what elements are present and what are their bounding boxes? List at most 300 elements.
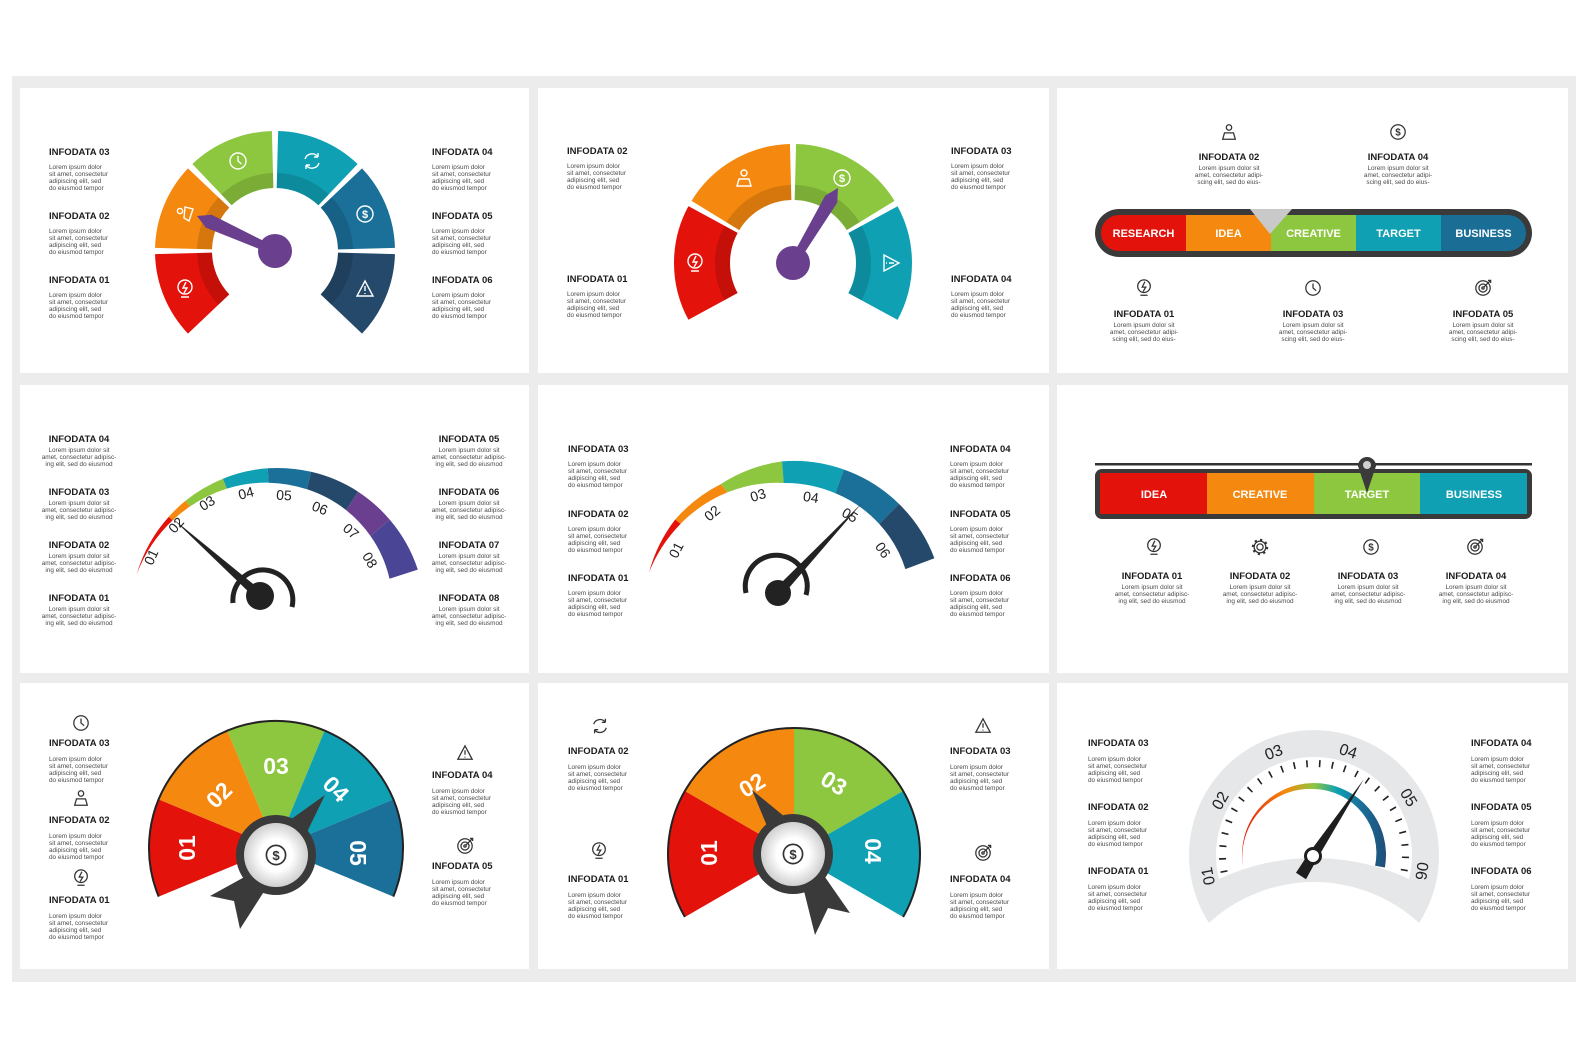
text: infodata 06: adipiscing elit, sed xyxy=(432,306,485,313)
text: infodata 05: sit amet, consectetur xyxy=(1471,827,1531,834)
text: infodata 03: adipiscing elit, sed xyxy=(49,178,102,185)
text: infodata 01: Lorem ipsum dolor xyxy=(567,291,621,298)
text: infodata 01: Lorem ipsum dolor xyxy=(1088,884,1142,891)
text: infodata 05: INFODATA 05 xyxy=(1453,309,1514,320)
text: infodata 01 xyxy=(567,274,628,319)
text: infodata 04: do eiusmod tempor xyxy=(432,809,488,816)
panel 5: six-step tapered gauge xyxy=(538,385,1049,673)
text: infodata 05: do eiusmod tempor xyxy=(950,547,1006,554)
text: infodata 02: sit amet, consectetur xyxy=(568,771,628,778)
scale numbers 01-06: 05 xyxy=(1396,786,1420,810)
text: infodata 01 xyxy=(49,895,110,941)
text: infodata 04: do eiusmod tempor xyxy=(1471,777,1527,784)
text: infodata 02 xyxy=(1088,802,1149,848)
panel 3: five-step pill bar xyxy=(1057,88,1568,373)
text: infodata 01: Lorem ipsum dolor sit xyxy=(1121,584,1183,591)
text: infodata 02: sit amet, consectetur xyxy=(568,533,628,540)
text: infodata 04: adipiscing elit, sed xyxy=(432,178,485,185)
text: infodata 05: amet, consectetur adipisc- xyxy=(432,454,506,461)
text: infodata 02: INFODATA 02 xyxy=(49,815,110,826)
text: infodata 04: Lorem ipsum dolor sit xyxy=(1445,584,1507,591)
icon: bulb xyxy=(1138,280,1150,295)
text: infodata 06: Lorem ipsum dolor xyxy=(1471,884,1525,891)
bar with top line: BUSINESS xyxy=(1446,489,1502,501)
text: infodata 04 xyxy=(1439,571,1513,605)
text: infodata 04: amet, consectetur adipisc- xyxy=(42,454,116,461)
text: infodata 04: sit amet, consectetur xyxy=(950,899,1010,906)
text: infodata 02: adipiscing elit, sed xyxy=(1088,834,1141,841)
icon: target xyxy=(976,845,991,860)
text: infodata 06: amet, consectetur adipisc- xyxy=(432,507,506,514)
text: infodata 05: INFODATA 05 xyxy=(432,861,493,872)
text: infodata 02: adipiscing elit, sed xyxy=(567,177,620,184)
text: infodata 02: Lorem ipsum dolor sit xyxy=(1198,165,1260,172)
text: infodata 07 xyxy=(432,540,506,574)
text: infodata 02: amet, consectetur adipi- xyxy=(1195,172,1263,179)
text: infodata 01: adipiscing elit, sed xyxy=(568,604,621,611)
text: infodata 02: sit amet, consectetur xyxy=(1088,827,1148,834)
text: infodata 03: do eiusmod tempor xyxy=(49,777,105,784)
scale numbers 01-06 xyxy=(1199,741,1431,886)
pointer spikes xyxy=(752,790,850,935)
text: infodata 03: do eiusmod tempor xyxy=(951,184,1007,191)
scale numbers 01-08: 03 xyxy=(196,492,218,514)
text: infodata 04 xyxy=(1364,152,1432,186)
text: infodata 02 xyxy=(568,509,629,554)
text: infodata 02: scing elit, sed do eius- xyxy=(1197,179,1261,186)
text: infodata 02: sit amet, consectetur xyxy=(567,170,627,177)
text: infodata 05 xyxy=(950,509,1011,554)
text: infodata 02: Lorem ipsum dolor sit xyxy=(48,553,110,560)
icon: warning xyxy=(976,719,990,732)
icon: person xyxy=(1223,125,1235,139)
text: infodata 04: adipiscing elit, sed xyxy=(951,305,1004,312)
text: infodata 03: INFODATA 03 xyxy=(49,147,110,158)
text: infodata 02: sit amet, consectetur xyxy=(49,235,109,242)
text: infodata 05: INFODATA 05 xyxy=(950,509,1011,520)
scale numbers 01-06 xyxy=(665,485,894,561)
text: infodata 02: do eiusmod tempor xyxy=(49,854,105,861)
gauge: six colored segments xyxy=(146,122,404,380)
text: infodata 01: Lorem ipsum dolor xyxy=(49,292,103,299)
text: infodata 04: INFODATA 04 xyxy=(432,770,493,781)
scale numbers 01-08: 08 xyxy=(359,549,381,571)
text: infodata 03: INFODATA 03 xyxy=(49,738,110,749)
scale numbers 01-06: 05 xyxy=(839,504,861,526)
gauge arc: tapered segments xyxy=(137,468,418,579)
text: infodata 02: do eiusmod tempor xyxy=(1088,841,1144,848)
scale numbers 01-06: 01 xyxy=(665,539,687,561)
text: infodata 03 xyxy=(42,487,116,521)
text: infodata 05: INFODATA 05 xyxy=(439,434,500,445)
text: infodata 03: Lorem ipsum dolor xyxy=(1088,756,1142,763)
text: infodata 01: adipiscing elit, sed xyxy=(49,927,102,934)
slice numbers: 03 xyxy=(816,765,852,801)
text: infodata 01: INFODATA 01 xyxy=(49,895,110,906)
text: infodata 03 xyxy=(568,444,629,489)
text: infodata 02: adipiscing elit, sed xyxy=(49,242,102,249)
icon: bulb xyxy=(75,870,87,885)
slice numbers xyxy=(696,765,886,866)
text: infodata 05: do eiusmod tempor xyxy=(432,900,488,907)
text: infodata 04: do eiusmod tempor xyxy=(432,185,488,192)
scale numbers 01-08: 04 xyxy=(236,483,256,503)
text: infodata 04: INFODATA 04 xyxy=(950,444,1011,455)
text: infodata 02: Lorem ipsum dolor xyxy=(568,526,622,533)
text: infodata 02: ing elit, sed do eiusmod xyxy=(45,567,113,574)
text: infodata 05: INFODATA 05 xyxy=(432,211,493,222)
panel 1: six-segment gauge xyxy=(20,88,529,373)
text: infodata 05: Lorem ipsum dolor sit xyxy=(438,447,500,454)
text: infodata 01: scing elit, sed do eius- xyxy=(1112,336,1176,343)
icon: dollar xyxy=(1364,540,1378,554)
slice numbers: 01 xyxy=(696,840,722,866)
icon: warning xyxy=(458,746,472,759)
text: infodata 01: Lorem ipsum dolor xyxy=(49,913,103,920)
text: infodata 04: INFODATA 04 xyxy=(1368,152,1429,163)
panel 9: speedometer with ticks xyxy=(1057,683,1568,969)
text: infodata 04: INFODATA 04 xyxy=(950,874,1011,885)
text: infodata 02 xyxy=(49,815,110,861)
text: infodata 01: Lorem ipsum dolor xyxy=(568,590,622,597)
icon: gear xyxy=(1253,540,1267,554)
needle with hub xyxy=(745,503,862,606)
bar xyxy=(1095,209,1532,257)
text: infodata 01 xyxy=(568,573,629,618)
text: infodata 03: ing elit, sed do eiusmod xyxy=(45,514,113,521)
text: infodata 07: ing elit, sed do eiusmod xyxy=(435,567,503,574)
text: infodata 05: adipiscing elit, sed xyxy=(432,242,485,249)
text: infodata 04 xyxy=(42,434,116,468)
panel 8: four-slice fan dial xyxy=(538,683,1049,969)
text: infodata 03: adipiscing elit, sed xyxy=(951,177,1004,184)
text: infodata 01: Lorem ipsum dolor xyxy=(568,892,622,899)
text: infodata 05: sit amet, consectetur xyxy=(432,235,492,242)
text: infodata 04: adipiscing elit, sed xyxy=(950,906,1003,913)
text: infodata 08: INFODATA 08 xyxy=(439,593,499,604)
text: infodata 01: do eiusmod tempor xyxy=(568,611,624,618)
speedometer body xyxy=(1177,730,1452,969)
scale numbers 01-06: 06 xyxy=(872,539,894,561)
text: infodata 01: do eiusmod tempor xyxy=(1088,905,1144,912)
text: infodata 02: adipiscing elit, sed xyxy=(568,540,621,547)
icon: clock xyxy=(1306,281,1320,295)
text: infodata 04: Lorem ipsum dolor xyxy=(950,892,1004,899)
text: infodata 01: INFODATA 01 xyxy=(1114,309,1175,320)
text: infodata 02 xyxy=(1223,571,1297,605)
icon: clock xyxy=(74,716,88,730)
text: infodata 04: amet, consectetur adipisc- xyxy=(1439,591,1513,598)
text: infodata 02: Lorem ipsum dolor xyxy=(567,163,621,170)
text: infodata 06: sit amet, consectetur xyxy=(432,299,492,306)
text: infodata 03: INFODATA 03 xyxy=(951,146,1012,157)
text: infodata 05 xyxy=(1471,802,1532,848)
text: infodata 03: INFODATA 03 xyxy=(1088,738,1149,749)
icon: person xyxy=(75,791,87,805)
text: infodata 05: do eiusmod tempor xyxy=(432,249,488,256)
text: infodata 03: Lorem ipsum dolor xyxy=(568,461,622,468)
text: infodata 02 xyxy=(42,540,116,574)
icon: bulb xyxy=(593,843,605,858)
bar: TARGET xyxy=(1376,228,1421,240)
text: infodata 06: do eiusmod tempor xyxy=(432,313,488,320)
text: infodata 03: sit amet, consectetur xyxy=(568,468,628,475)
text: infodata 02: INFODATA 02 xyxy=(1088,802,1149,813)
text: infodata 01: INFODATA 01 xyxy=(568,874,629,885)
text: infodata 01 xyxy=(42,593,116,627)
bar with top line: IDEA xyxy=(1141,489,1167,501)
text: infodata 01 xyxy=(568,874,629,920)
text: infodata 02: Lorem ipsum dolor xyxy=(1088,820,1142,827)
text: infodata 06: INFODATA 06 xyxy=(432,275,493,286)
text: infodata 05: Lorem ipsum dolor xyxy=(1471,820,1525,827)
text: infodata 05: do eiusmod tempor xyxy=(1471,841,1527,848)
text: infodata 06: adipiscing elit, sed xyxy=(950,604,1003,611)
text: infodata 01: adipiscing elit, sed xyxy=(567,305,620,312)
text: infodata 04: do eiusmod tempor xyxy=(951,312,1007,319)
slice numbers: 05 xyxy=(345,840,371,866)
text: infodata 03 xyxy=(1088,738,1149,784)
text: infodata 02: sit amet, consectetur xyxy=(49,840,109,847)
fan slices xyxy=(668,728,920,917)
icon: bulb xyxy=(1148,539,1160,554)
text: infodata 02: INFODATA 02 xyxy=(49,540,109,551)
text: infodata 01: amet, consectetur adipi- xyxy=(1110,329,1178,336)
gauge: four colored segments xyxy=(668,138,918,388)
text: infodata 03: sit amet, consectetur xyxy=(49,763,109,770)
slice numbers: 02 xyxy=(201,777,237,813)
text: infodata 01: do eiusmod tempor xyxy=(567,312,623,319)
text: infodata 04: sit amet, consectetur xyxy=(432,171,492,178)
slice numbers: 04 xyxy=(318,771,354,807)
text: infodata 03: Lorem ipsum dolor xyxy=(951,163,1005,170)
text: infodata 05: sit amet, consectetur xyxy=(950,533,1010,540)
pointer spikes xyxy=(210,795,325,929)
scale numbers 01-06: 03 xyxy=(1263,742,1285,764)
scale numbers 01-06: 01 xyxy=(1199,866,1219,886)
slice numbers: 02 xyxy=(734,767,770,803)
needle xyxy=(197,215,292,268)
text: infodata 04: amet, consectetur adipi- xyxy=(1364,172,1432,179)
text: infodata 04 xyxy=(432,770,493,816)
icon: refresh xyxy=(594,719,606,733)
text: infodata 04: Lorem ipsum dolor sit xyxy=(48,447,110,454)
gauge arc: tapered segments xyxy=(649,461,934,572)
text: infodata 03: adipiscing elit, sed xyxy=(1088,770,1141,777)
text: infodata 02: adipiscing elit, sed xyxy=(568,778,621,785)
text: infodata 04: INFODATA 04 xyxy=(432,147,493,158)
text: infodata 04: INFODATA 04 xyxy=(1471,738,1532,749)
text: infodata 01: INFODATA 01 xyxy=(1122,571,1183,582)
scale numbers 01-08: 06 xyxy=(310,498,330,518)
text: infodata 03 xyxy=(49,738,110,784)
bar: BUSINESS xyxy=(1455,228,1512,240)
text: infodata 06: sit amet, consectetur xyxy=(950,597,1010,604)
text: infodata 02: INFODATA 02 xyxy=(568,746,629,757)
text: infodata 03: Lorem ipsum dolor xyxy=(950,764,1004,771)
text: infodata 01: sit amet, consectetur xyxy=(1088,891,1148,898)
text: infodata 02: ing elit, sed do eiusmod xyxy=(1226,598,1294,605)
text: infodata 07: INFODATA 07 xyxy=(439,540,499,551)
text: infodata 03: INFODATA 03 xyxy=(1283,309,1343,320)
text: infodata 06: INFODATA 06 xyxy=(950,573,1011,584)
text: infodata 01: adipiscing elit, sed xyxy=(49,306,102,313)
text: infodata 05: amet, consectetur adipi- xyxy=(1449,329,1517,336)
text: infodata 04: INFODATA 04 xyxy=(49,434,110,445)
scale numbers 01-06: 04 xyxy=(802,488,820,506)
text: infodata 08: Lorem ipsum dolor sit xyxy=(438,606,500,613)
text: infodata 04 xyxy=(1471,738,1532,784)
text: infodata 06 xyxy=(432,487,506,521)
text: infodata 08: amet, consectetur adipisc- xyxy=(432,613,506,620)
text: infodata 02: amet, consectetur adipisc- xyxy=(42,560,116,567)
text: infodata 03 xyxy=(951,146,1012,191)
text: infodata 07: Lorem ipsum dolor sit xyxy=(438,553,500,560)
scale numbers 01-08: 02 xyxy=(165,514,187,536)
text: infodata 01: amet, consectetur adipisc- xyxy=(42,613,116,620)
scale numbers 01-06: 02 xyxy=(1209,789,1233,813)
text: infodata 04: INFODATA 04 xyxy=(1446,571,1507,582)
bar: CREATIVE xyxy=(1286,228,1341,240)
text: infodata 06: INFODATA 06 xyxy=(439,487,499,498)
scale numbers 01-06: 06 xyxy=(1411,861,1431,881)
icon: target xyxy=(1476,280,1491,295)
text: infodata 01: Lorem ipsum dolor sit xyxy=(48,606,110,613)
text: infodata 03: amet, consectetur adipisc- xyxy=(42,507,116,514)
text: infodata 01: sit amet, consectetur xyxy=(568,597,628,604)
scale numbers 01-06: 02 xyxy=(701,502,723,524)
text: infodata 01: sit amet, consectetur xyxy=(567,298,627,305)
text: infodata 05: ing elit, sed do eiusmod xyxy=(435,461,503,468)
text: infodata 05: INFODATA 05 xyxy=(1471,802,1532,813)
text: infodata 04: Lorem ipsum dolor sit xyxy=(1367,165,1429,172)
text: infodata 02: amet, consectetur adipisc- xyxy=(1223,591,1297,598)
text: infodata 03: INFODATA 03 xyxy=(568,444,629,455)
text: infodata 06 xyxy=(950,573,1011,618)
text: infodata 02 xyxy=(49,211,110,256)
needle xyxy=(776,188,838,280)
text: infodata 03: adipiscing elit, sed xyxy=(568,475,621,482)
text: infodata 04: sit amet, consectetur xyxy=(1471,763,1531,770)
text: infodata 03: Lorem ipsum dolor sit xyxy=(48,500,110,507)
text: infodata 06: Lorem ipsum dolor xyxy=(432,292,486,299)
text: infodata 01: do eiusmod tempor xyxy=(49,313,105,320)
bar: IDEA xyxy=(1215,228,1242,240)
text: infodata 05 xyxy=(1449,309,1517,343)
icons on segments xyxy=(177,153,373,297)
text: infodata 05: Lorem ipsum dolor xyxy=(432,228,486,235)
text: infodata 02: INFODATA 02 xyxy=(1230,571,1290,582)
text: infodata 02 xyxy=(568,746,629,792)
slice numbers: 03 xyxy=(263,753,289,779)
text: infodata 03: ing elit, sed do eiusmod xyxy=(1334,598,1402,605)
text: infodata 06: Lorem ipsum dolor xyxy=(950,590,1004,597)
text: infodata 05: adipiscing elit, sed xyxy=(432,893,485,900)
text: infodata 05: adipiscing elit, sed xyxy=(950,540,1003,547)
text: infodata 05 xyxy=(432,861,493,907)
text: infodata 04: do eiusmod tempor xyxy=(950,482,1006,489)
text: infodata 05: Lorem ipsum dolor xyxy=(950,526,1004,533)
text: infodata 06: Lorem ipsum dolor sit xyxy=(438,500,500,507)
text: infodata 04: Lorem ipsum dolor xyxy=(432,164,486,171)
slice numbers xyxy=(174,753,371,866)
slice numbers: 04 xyxy=(860,838,886,864)
text: infodata 04 xyxy=(950,444,1011,489)
text: infodata 01: INFODATA 01 xyxy=(1088,866,1149,877)
text: infodata 06 xyxy=(1471,866,1532,912)
text: infodata 04: ing elit, sed do eiusmod xyxy=(1442,598,1510,605)
text: infodata 01: ing elit, sed do eiusmod xyxy=(45,620,113,627)
text: infodata 04: adipiscing elit, sed xyxy=(950,475,1003,482)
bar with top line xyxy=(1095,463,1532,519)
text: infodata 03: sit amet, consectetur xyxy=(951,170,1011,177)
text: infodata 02: Lorem ipsum dolor xyxy=(568,764,622,771)
text: infodata 04: ing elit, sed do eiusmod xyxy=(45,461,113,468)
text: infodata 03 xyxy=(950,746,1011,792)
bar with top line: TARGET xyxy=(1345,489,1389,501)
text: infodata 01: sit amet, consectetur xyxy=(49,920,109,927)
text: infodata 01: adipiscing elit, sed xyxy=(1088,898,1141,905)
text: infodata 04: sit amet, consectetur xyxy=(950,468,1010,475)
text: infodata 01 xyxy=(49,275,110,320)
text: infodata 05: sit amet, consectetur xyxy=(432,886,492,893)
text: infodata 03: adipiscing elit, sed xyxy=(950,778,1003,785)
text: infodata 03: INFODATA 03 xyxy=(950,746,1011,757)
text: infodata 02: do eiusmod tempor xyxy=(567,184,623,191)
panel 7: five-slice fan dial xyxy=(20,683,529,969)
text: infodata 04: Lorem ipsum dolor xyxy=(1471,756,1525,763)
fan slices xyxy=(149,721,403,897)
marker triangle xyxy=(1250,209,1292,234)
text: infodata 03: Lorem ipsum dolor sit xyxy=(1282,322,1344,329)
text: infodata 02: Lorem ipsum dolor sit xyxy=(1229,584,1291,591)
text: infodata 02: Lorem ipsum dolor xyxy=(49,833,103,840)
text: infodata 06: ing elit, sed do eiusmod xyxy=(435,514,503,521)
text: infodata 02: do eiusmod tempor xyxy=(568,785,624,792)
text: infodata 03: do eiusmod tempor xyxy=(1088,777,1144,784)
text: infodata 01 xyxy=(1115,571,1189,605)
text: infodata 03: INFODATA 03 xyxy=(49,487,109,498)
text: infodata 03 xyxy=(49,147,110,192)
needle with hub xyxy=(172,518,293,610)
text: infodata 06: adipiscing elit, sed xyxy=(1471,898,1524,905)
text: infodata 04: sit amet, consectetur xyxy=(951,298,1011,305)
text: infodata 03: do eiusmod tempor xyxy=(950,785,1006,792)
text: infodata 01: do eiusmod tempor xyxy=(49,934,105,941)
text: infodata 08 xyxy=(432,593,506,627)
slice numbers: 01 xyxy=(174,835,200,861)
text: infodata 03: sit amet, consectetur xyxy=(49,171,109,178)
text: infodata 01 xyxy=(1110,309,1178,343)
text: infodata 01: sit amet, consectetur xyxy=(568,899,628,906)
text: infodata 02 xyxy=(1195,152,1263,186)
text: infodata 05 xyxy=(432,434,506,468)
panel 4: eight-step tapered gauge xyxy=(20,385,529,673)
text: infodata 03: sit amet, consectetur xyxy=(950,771,1010,778)
text: infodata 04 xyxy=(951,274,1012,319)
icon: dollar xyxy=(1391,125,1405,139)
text: infodata 03: Lorem ipsum dolor xyxy=(49,756,103,763)
text: infodata 04: adipiscing elit, sed xyxy=(1471,770,1524,777)
text: infodata 04: Lorem ipsum dolor xyxy=(432,788,486,795)
text: infodata 04: sit amet, consectetur xyxy=(432,795,492,802)
panel 6: four-step bar with pin xyxy=(1057,385,1568,673)
bar: RESEARCH xyxy=(1113,228,1174,240)
text: infodata 07: amet, consectetur adipisc- xyxy=(432,560,506,567)
text: infodata 02: Lorem ipsum dolor xyxy=(49,228,103,235)
scale numbers 01-08: 01 xyxy=(140,546,162,567)
scale numbers 01-06: 03 xyxy=(748,485,768,505)
